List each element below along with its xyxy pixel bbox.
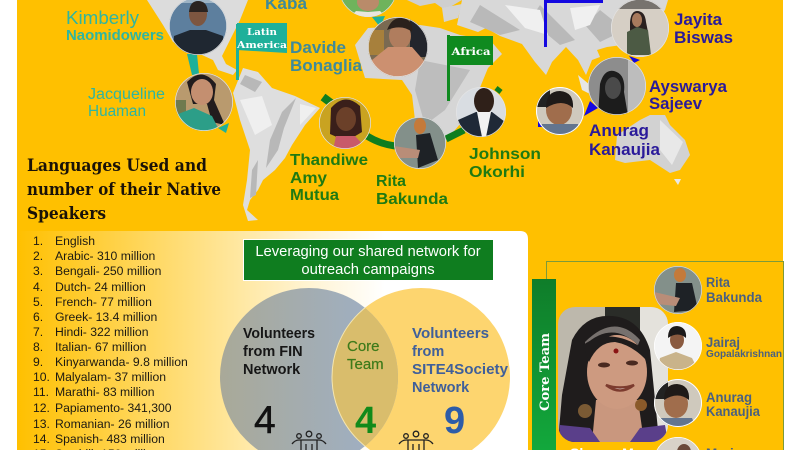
name: Johnson Okorhi — [469, 146, 541, 181]
name: Rita Bakunda core team: Bakunda — [706, 290, 762, 305]
heading: languages: number of their Native — [27, 180, 221, 200]
photo: lead portrait — [558, 307, 668, 442]
avatar: Jayita — [611, 0, 669, 57]
name: Anurag Kanaujia: Kanaujia — [589, 140, 661, 159]
venn: FIN volunteers: Volunteers — [243, 326, 315, 342]
language list: Italian- 67 million — [55, 340, 146, 354]
venn: FIN volunteers — [243, 327, 314, 374]
language list: 2. — [33, 249, 43, 263]
heading: languages: Speakers — [27, 204, 106, 224]
name: Jacqueline Huaman: Jacqueline — [88, 86, 165, 103]
connectors: asia — [538, 56, 640, 127]
panel: languages and venn — [17, 231, 528, 450]
language list: Greek- 13.4 million — [55, 310, 157, 324]
name: Rita Bakunda — [376, 173, 448, 208]
venn: SITE4Society volunteers: from — [412, 344, 444, 360]
banner: leveraging network: outreach campaigns — [301, 262, 435, 278]
venn: SITE4Society volunteers — [412, 326, 508, 396]
name: Rita Bakunda: Bakunda — [376, 191, 448, 208]
name: Thandiwe Amy Mutua: Mutua — [290, 187, 339, 204]
avatar: Davide — [368, 17, 428, 78]
language list: 14. — [33, 432, 50, 446]
avatar: Thandiwe — [319, 97, 371, 150]
name: Anurag Kanaujia — [589, 121, 661, 159]
language list: Kinyarwanda- 9.8 million — [55, 355, 188, 369]
name: Jayita Biswas: Jayita — [674, 10, 723, 29]
core team vertical label — [532, 279, 556, 450]
name: Davide Bonaglia: Bonaglia — [290, 56, 363, 75]
language list: 8. — [33, 340, 43, 354]
language list — [33, 234, 188, 450]
venn: FIN volunteers: Network — [243, 362, 301, 378]
name: Jairaj Gopalakrishnan — [706, 337, 782, 359]
avatar: Johnson — [456, 87, 506, 137]
language list: 9. — [33, 355, 43, 369]
connectors: latin america — [187, 16, 385, 133]
venn: core team label: Team — [347, 356, 384, 373]
name: Johnson Okorhi: Okorhi — [469, 164, 525, 181]
name: Anurag Kanaujia core team — [706, 390, 760, 419]
avatar: top volunteer — [339, 0, 397, 17]
language list: Papiamento- 341,300 — [55, 401, 172, 415]
language list: Malyalam- 37 million — [55, 370, 166, 384]
name: Anurag Kanaujia core team: Anurag — [706, 390, 752, 405]
world map — [147, 0, 690, 221]
venn diagram — [220, 288, 510, 450]
venn: core team label — [347, 340, 383, 370]
language list: Bengali- 250 million — [55, 264, 161, 278]
name: Ayswarya Sajeev: Ayswarya — [649, 78, 728, 96]
banner: leveraging network: Leveraging our shared network for — [255, 244, 481, 260]
name: Rita Bakunda core team — [706, 277, 762, 302]
avatar: Jacqueline — [174, 72, 234, 132]
venn: SITE4Society volunteers: SITE4Society — [412, 362, 508, 378]
connectors: africa — [323, 88, 501, 146]
language list: Dutch- 24 million — [55, 280, 146, 294]
name: Thandiwe Amy Mutua — [290, 152, 368, 204]
flag: Africa: Africa — [450, 46, 491, 58]
name: Thandiwe Amy Mutua: Thandiwe — [290, 152, 368, 169]
name: Davide Bonaglia: Davide — [290, 38, 346, 57]
language list: 4. — [33, 280, 43, 294]
language list: 10. — [33, 370, 50, 384]
name: Anurag Kanaujia core team: Kanaujia — [706, 404, 760, 419]
flag: Latin America — [236, 23, 287, 80]
language list: Spanish- 483 million — [55, 432, 165, 446]
icon: people SITE4Society — [399, 431, 433, 450]
name: Anurag Kanaujia: Anurag — [589, 121, 649, 140]
panel: core team — [532, 262, 784, 450]
avatar: Kimberly — [169, 0, 227, 55]
name: Ayswarya Sajeev: Sajeev — [649, 95, 703, 113]
flag: Africa — [447, 35, 493, 101]
avatar: Jairaj — [654, 322, 702, 370]
heading: languages: Languages Used and — [27, 156, 207, 176]
language list: 11. — [33, 385, 49, 399]
name: Ayswarya Sajeev — [649, 78, 728, 113]
name: Jairaj Gopalakrishnan: Jairaj — [706, 335, 740, 350]
venn: SITE4Society count: 9 — [444, 400, 465, 442]
venn: FIN volunteers: from FIN — [243, 344, 303, 360]
venn: SITE4Society volunteers: Volunteers — [412, 326, 489, 342]
name: Kimberly Naomidowers: Kimberly — [66, 8, 139, 28]
language list: 3. — [33, 264, 43, 278]
language list: 12. — [33, 401, 50, 415]
avatar: Anurag — [536, 87, 584, 135]
language list: 5. — [33, 295, 43, 309]
name: Kimberly Naomidowers — [66, 8, 164, 44]
language list: 1. — [33, 234, 43, 248]
name: Jairaj Gopalakrishnan: Gopalakrishnan — [706, 349, 782, 360]
language list: 13. — [33, 417, 50, 431]
name: Davide Bonaglia — [290, 38, 363, 75]
venn: core team label: Core — [347, 338, 380, 355]
flag: Latin America: America — [236, 40, 287, 51]
banner: leveraging network — [244, 240, 494, 280]
language list: Arabic- 310 million — [55, 249, 155, 263]
name: Kimberly Naomidowers: Naomidowers — [66, 27, 164, 44]
avatar: Rita core team — [654, 266, 702, 314]
language list: 6. — [33, 310, 43, 324]
venn: core count: 4 — [355, 400, 376, 442]
flag: Latin America: Latin — [247, 27, 277, 38]
language list: Marathi- 83 million — [55, 385, 155, 399]
language list: English — [55, 234, 95, 248]
language list: Hindi- 322 million — [55, 325, 148, 339]
avatar: Anurag core team — [654, 379, 702, 427]
name: Rita Bakunda: Rita — [376, 173, 406, 190]
names on map — [66, 0, 733, 208]
name: Johnson Okorhi: Johnson — [469, 146, 541, 163]
heading: languages — [27, 156, 221, 224]
name: Jacqueline Huaman: Huaman — [88, 103, 146, 120]
venn: SITE4Society volunteers: Network — [412, 380, 470, 396]
avatar: Rita — [394, 117, 446, 169]
name: Jayita Biswas — [674, 10, 733, 47]
venn: FIN count: 4 — [254, 399, 276, 442]
language list: 7. — [33, 325, 43, 339]
name: Jayita Biswas: Biswas — [674, 28, 733, 47]
name: Rita Bakunda core team: Rita — [706, 275, 730, 290]
name: Thandiwe Amy Mutua: Amy — [290, 170, 327, 187]
name: Jacqueline Huaman — [88, 86, 165, 120]
icon: people FIN — [292, 431, 326, 450]
flag: Asia — [544, 0, 603, 47]
avatar: fourth core member — [656, 437, 700, 450]
core team vertical label: Core Team — [538, 333, 553, 411]
avatar: Ayswarya — [588, 57, 646, 116]
language list: Romanian- 26 million — [55, 417, 169, 431]
language list: French- 77 million — [55, 295, 152, 309]
